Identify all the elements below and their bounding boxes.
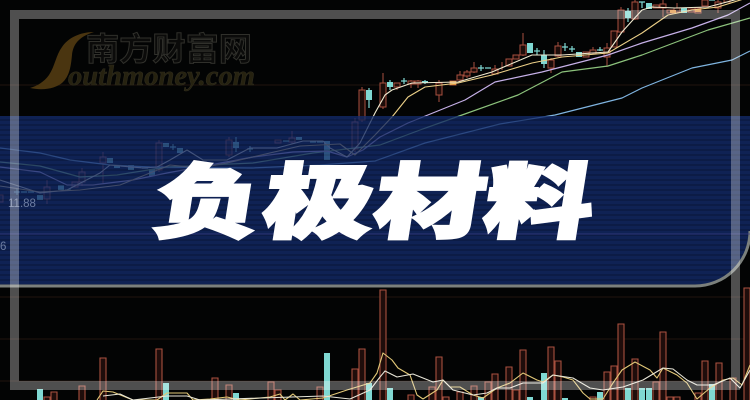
cyan volume bars <box>37 353 715 400</box>
candlesticks: rising <box>0 0 730 204</box>
logo: Southmoney watermark <box>30 24 255 92</box>
title: 极 <box>256 137 385 254</box>
axis label fragment: 6 <box>0 241 6 253</box>
title: 料 <box>477 137 604 255</box>
logo swoosh S <box>30 32 94 89</box>
logo Chinese name: 南方财富网 <box>86 24 252 70</box>
moving average lines <box>0 0 750 193</box>
volume chart: bars and lines <box>37 288 750 400</box>
logo domain: outhmoney.com <box>68 60 255 92</box>
blue title panel <box>0 116 750 286</box>
axis price label: 11.88 <box>8 198 36 210</box>
title: 负 <box>148 137 271 254</box>
volume average lines <box>97 353 750 400</box>
price chart: candlesticks and moving averages <box>0 0 750 204</box>
red volume bars <box>44 288 750 400</box>
title <box>148 137 604 255</box>
title: 材 <box>367 137 496 254</box>
